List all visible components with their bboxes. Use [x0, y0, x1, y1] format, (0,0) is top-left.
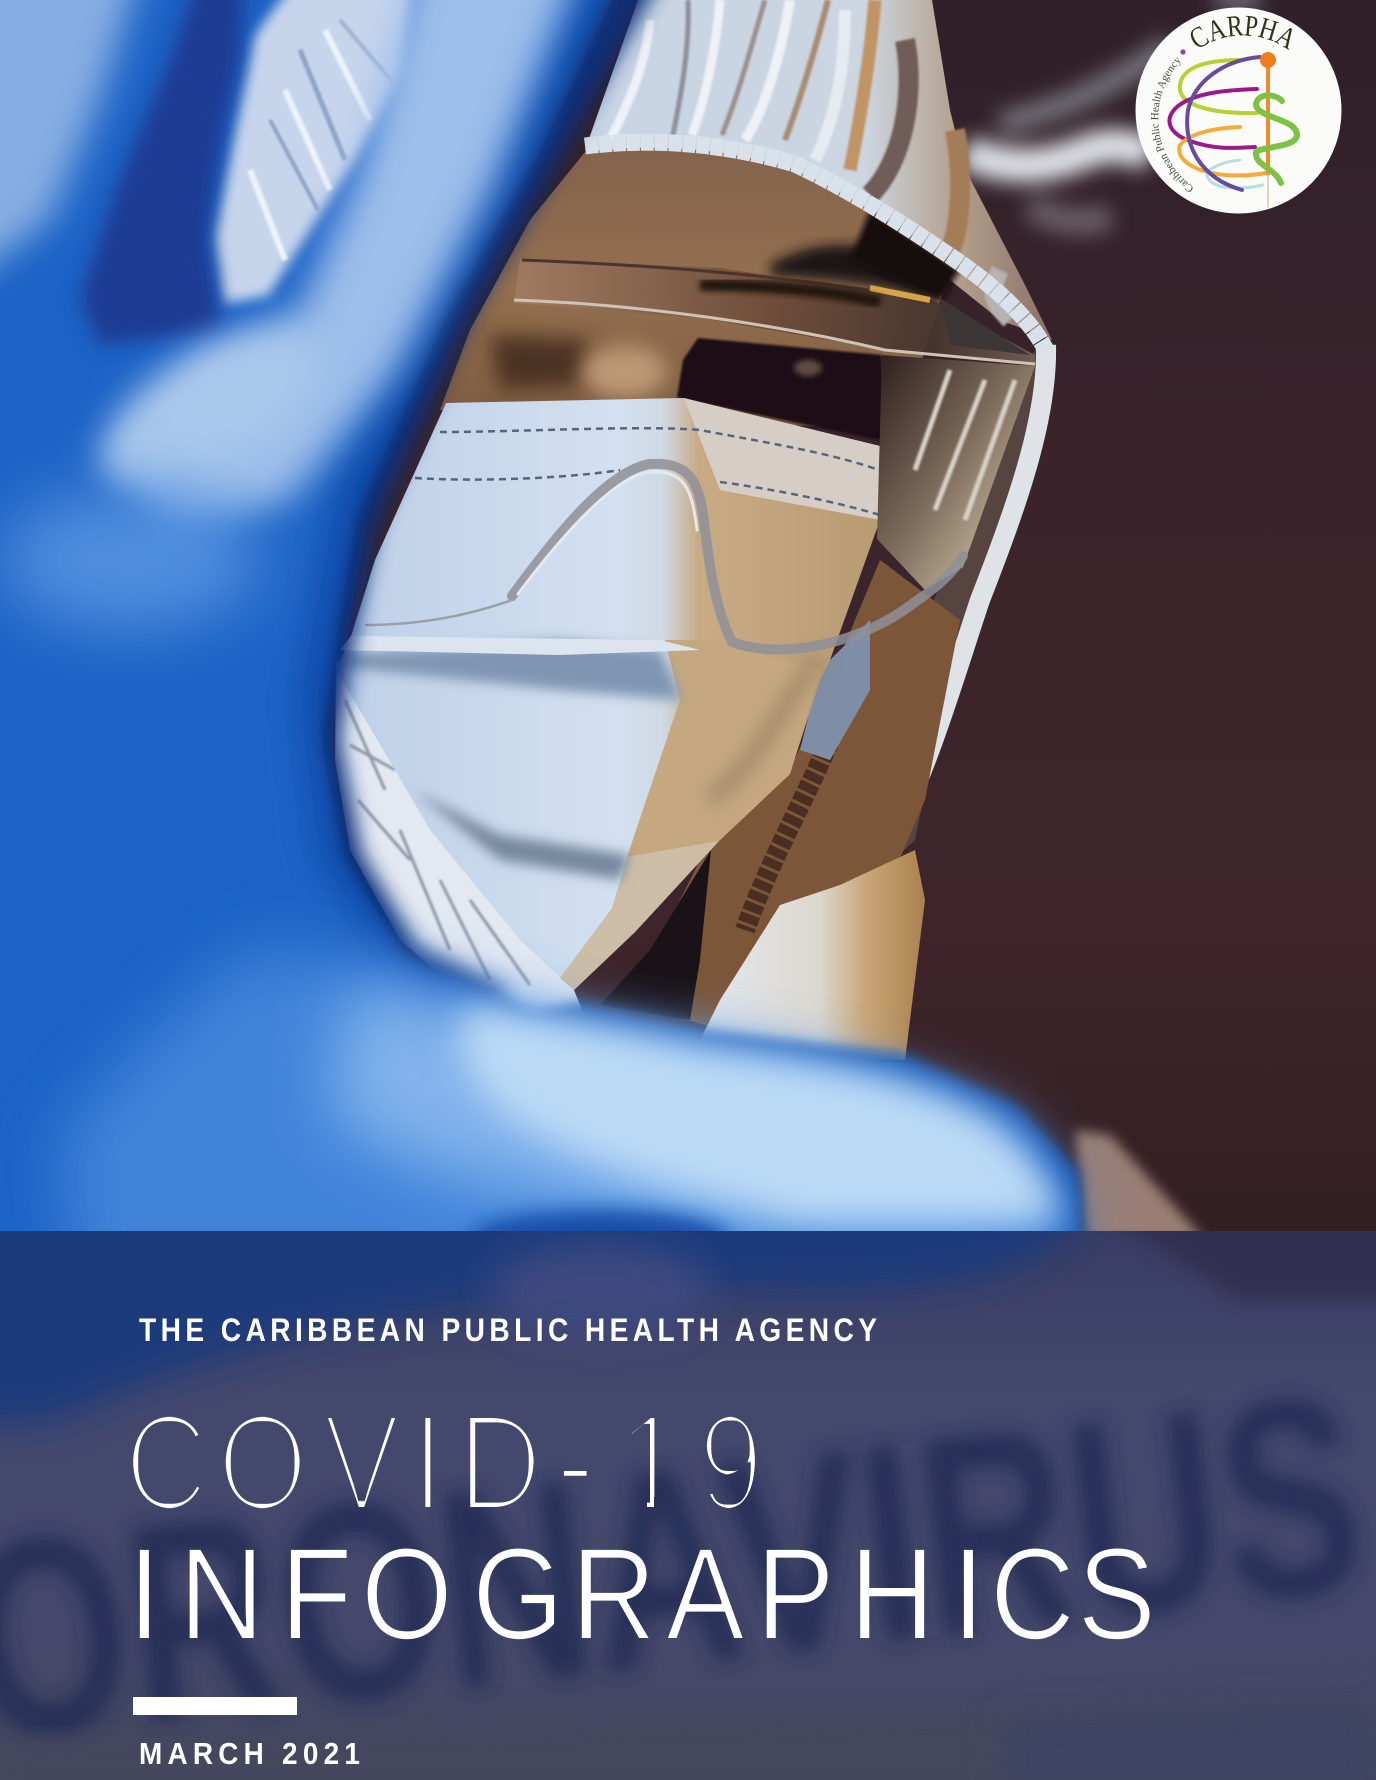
logo staff ball [1260, 52, 1276, 68]
lower thumb soft light [330, 985, 1040, 1225]
dark gap between fingers [80, 0, 245, 345]
palm light [0, 490, 260, 630]
CARPHA logo [1136, 8, 1342, 214]
eye socket [677, 338, 884, 441]
suit flap [690, 850, 925, 1060]
lower thumb mid tone [60, 950, 1071, 1330]
blue glove [0, 0, 1086, 1330]
cheek highlight [583, 346, 667, 398]
neck interior [677, 560, 960, 1026]
organisation line: THE CARIBBEAN PUBLIC HEALTH AGENCY [139, 1313, 877, 1348]
brow shadow [770, 245, 950, 300]
face skin [440, 148, 960, 441]
elastic hood trim [585, 142, 1046, 350]
hood cap [585, 0, 1052, 340]
right hood edge [903, 340, 1040, 851]
top right shadow [1100, 1210, 1376, 1300]
background wall [932, 0, 1376, 116]
raised finger highlight [110, 0, 590, 540]
protective suit [335, 0, 1205, 1240]
logo dot [1180, 49, 1186, 55]
sleeve [1075, 1130, 1205, 1240]
goggles side lens [877, 355, 1035, 590]
logo name: CARPHA [1190, 16, 1292, 50]
logo globe and staff [1169, 57, 1297, 207]
date: MARCH 2021 [139, 1737, 360, 1771]
top-left finger [0, 0, 150, 300]
blurred glove under banner [0, 1180, 1100, 1430]
goggles arm and rim [366, 464, 963, 649]
mask side beige [627, 640, 792, 857]
hood pleats [610, 0, 1010, 320]
accent bar [133, 1697, 297, 1715]
lower thumb highlight [460, 1005, 1058, 1222]
hood streaks between fingers [250, 20, 395, 260]
bottom shade [0, 1705, 1376, 1780]
safety goggles [366, 258, 1035, 649]
hood seen between fingers [214, 0, 415, 304]
mask fold shadows [340, 640, 682, 700]
logo agency text: Caribbean Public Health Agency [1150, 57, 1193, 192]
mask stitching [415, 428, 884, 515]
glove dark edge [0, 0, 1086, 1330]
title banner background [0, 1180, 1376, 1780]
photo: masked health worker behind a blue glove [0, 0, 1376, 1330]
goggles brow band [514, 258, 1035, 366]
smoke wisps [965, 0, 1260, 222]
left ruffle [335, 660, 590, 1030]
title line 1: COVID-19 [124, 1386, 764, 1540]
mesh strap [800, 620, 870, 760]
title line 2: INFOGRAPHICS [128, 1521, 1156, 1667]
surgical mask [336, 398, 884, 990]
glove shadow edge [322, 0, 645, 1005]
glove base tone [0, 0, 1060, 1330]
logo disc [1136, 8, 1342, 214]
